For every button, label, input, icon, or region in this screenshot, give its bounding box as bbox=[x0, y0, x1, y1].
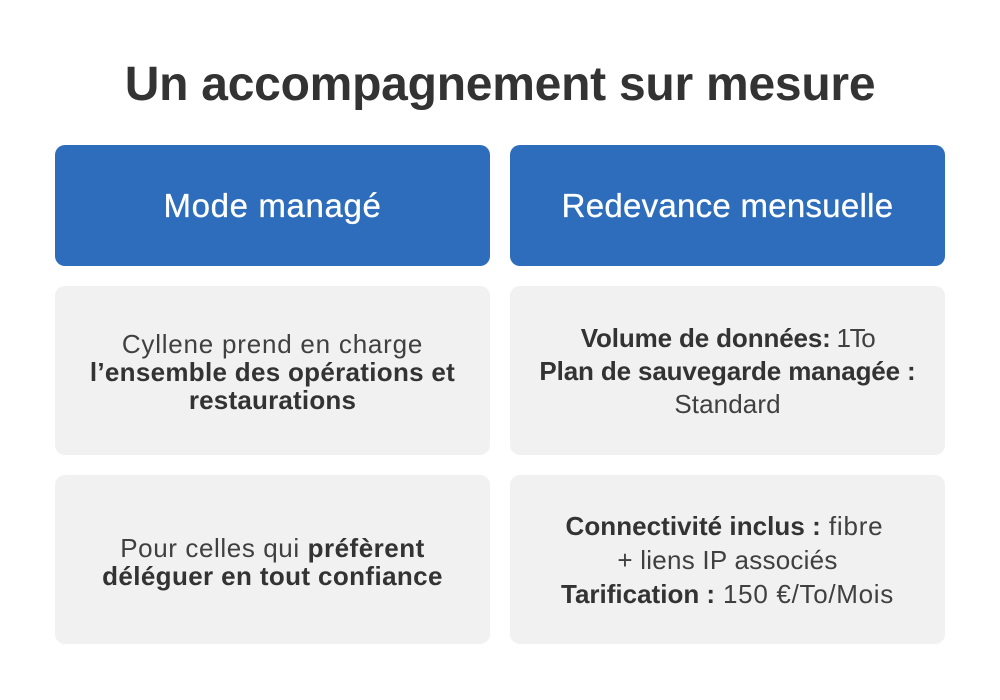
panel: Mode managé header bbox=[55, 145, 490, 266]
panel: Mode managé header: Mode managé bbox=[163, 186, 382, 224]
panel: Cyllene operations text: Cyllene prend en charge bbox=[122, 329, 423, 359]
panel: delegation text: Pour celles qui préfèrent bbox=[120, 532, 425, 562]
panel: Redevance mensuelle header bbox=[510, 145, 945, 266]
panel: Cyllene operations text: restaurations bbox=[189, 385, 356, 415]
panel: connectivity and pricing text bbox=[510, 475, 945, 644]
panel: Redevance mensuelle header: Redevance mensuelle bbox=[562, 186, 893, 224]
panel: connectivity and pricing text: Connectivité inclus : fibre bbox=[566, 511, 883, 541]
panel: volume and backup plan text: Volume de données: 1To bbox=[581, 322, 874, 352]
panel: connectivity and pricing text: Tarification : 150 €/To/Mois bbox=[561, 579, 894, 609]
panel: Cyllene operations text: l’ensemble des opérations et bbox=[90, 357, 455, 387]
panel: Cyllene operations text bbox=[55, 286, 490, 455]
panel: volume and backup plan text bbox=[510, 286, 945, 455]
panel: delegation text bbox=[55, 475, 490, 644]
panel: delegation text: déléguer en tout confiance bbox=[102, 560, 443, 590]
panel: connectivity and pricing text: + liens IP associés bbox=[617, 545, 838, 575]
title: Un accompagnement sur mesure bbox=[125, 58, 875, 111]
panel: volume and backup plan text: Standard bbox=[674, 388, 781, 418]
panel: volume and backup plan text: Plan de sauvegarde managée : bbox=[539, 356, 916, 386]
